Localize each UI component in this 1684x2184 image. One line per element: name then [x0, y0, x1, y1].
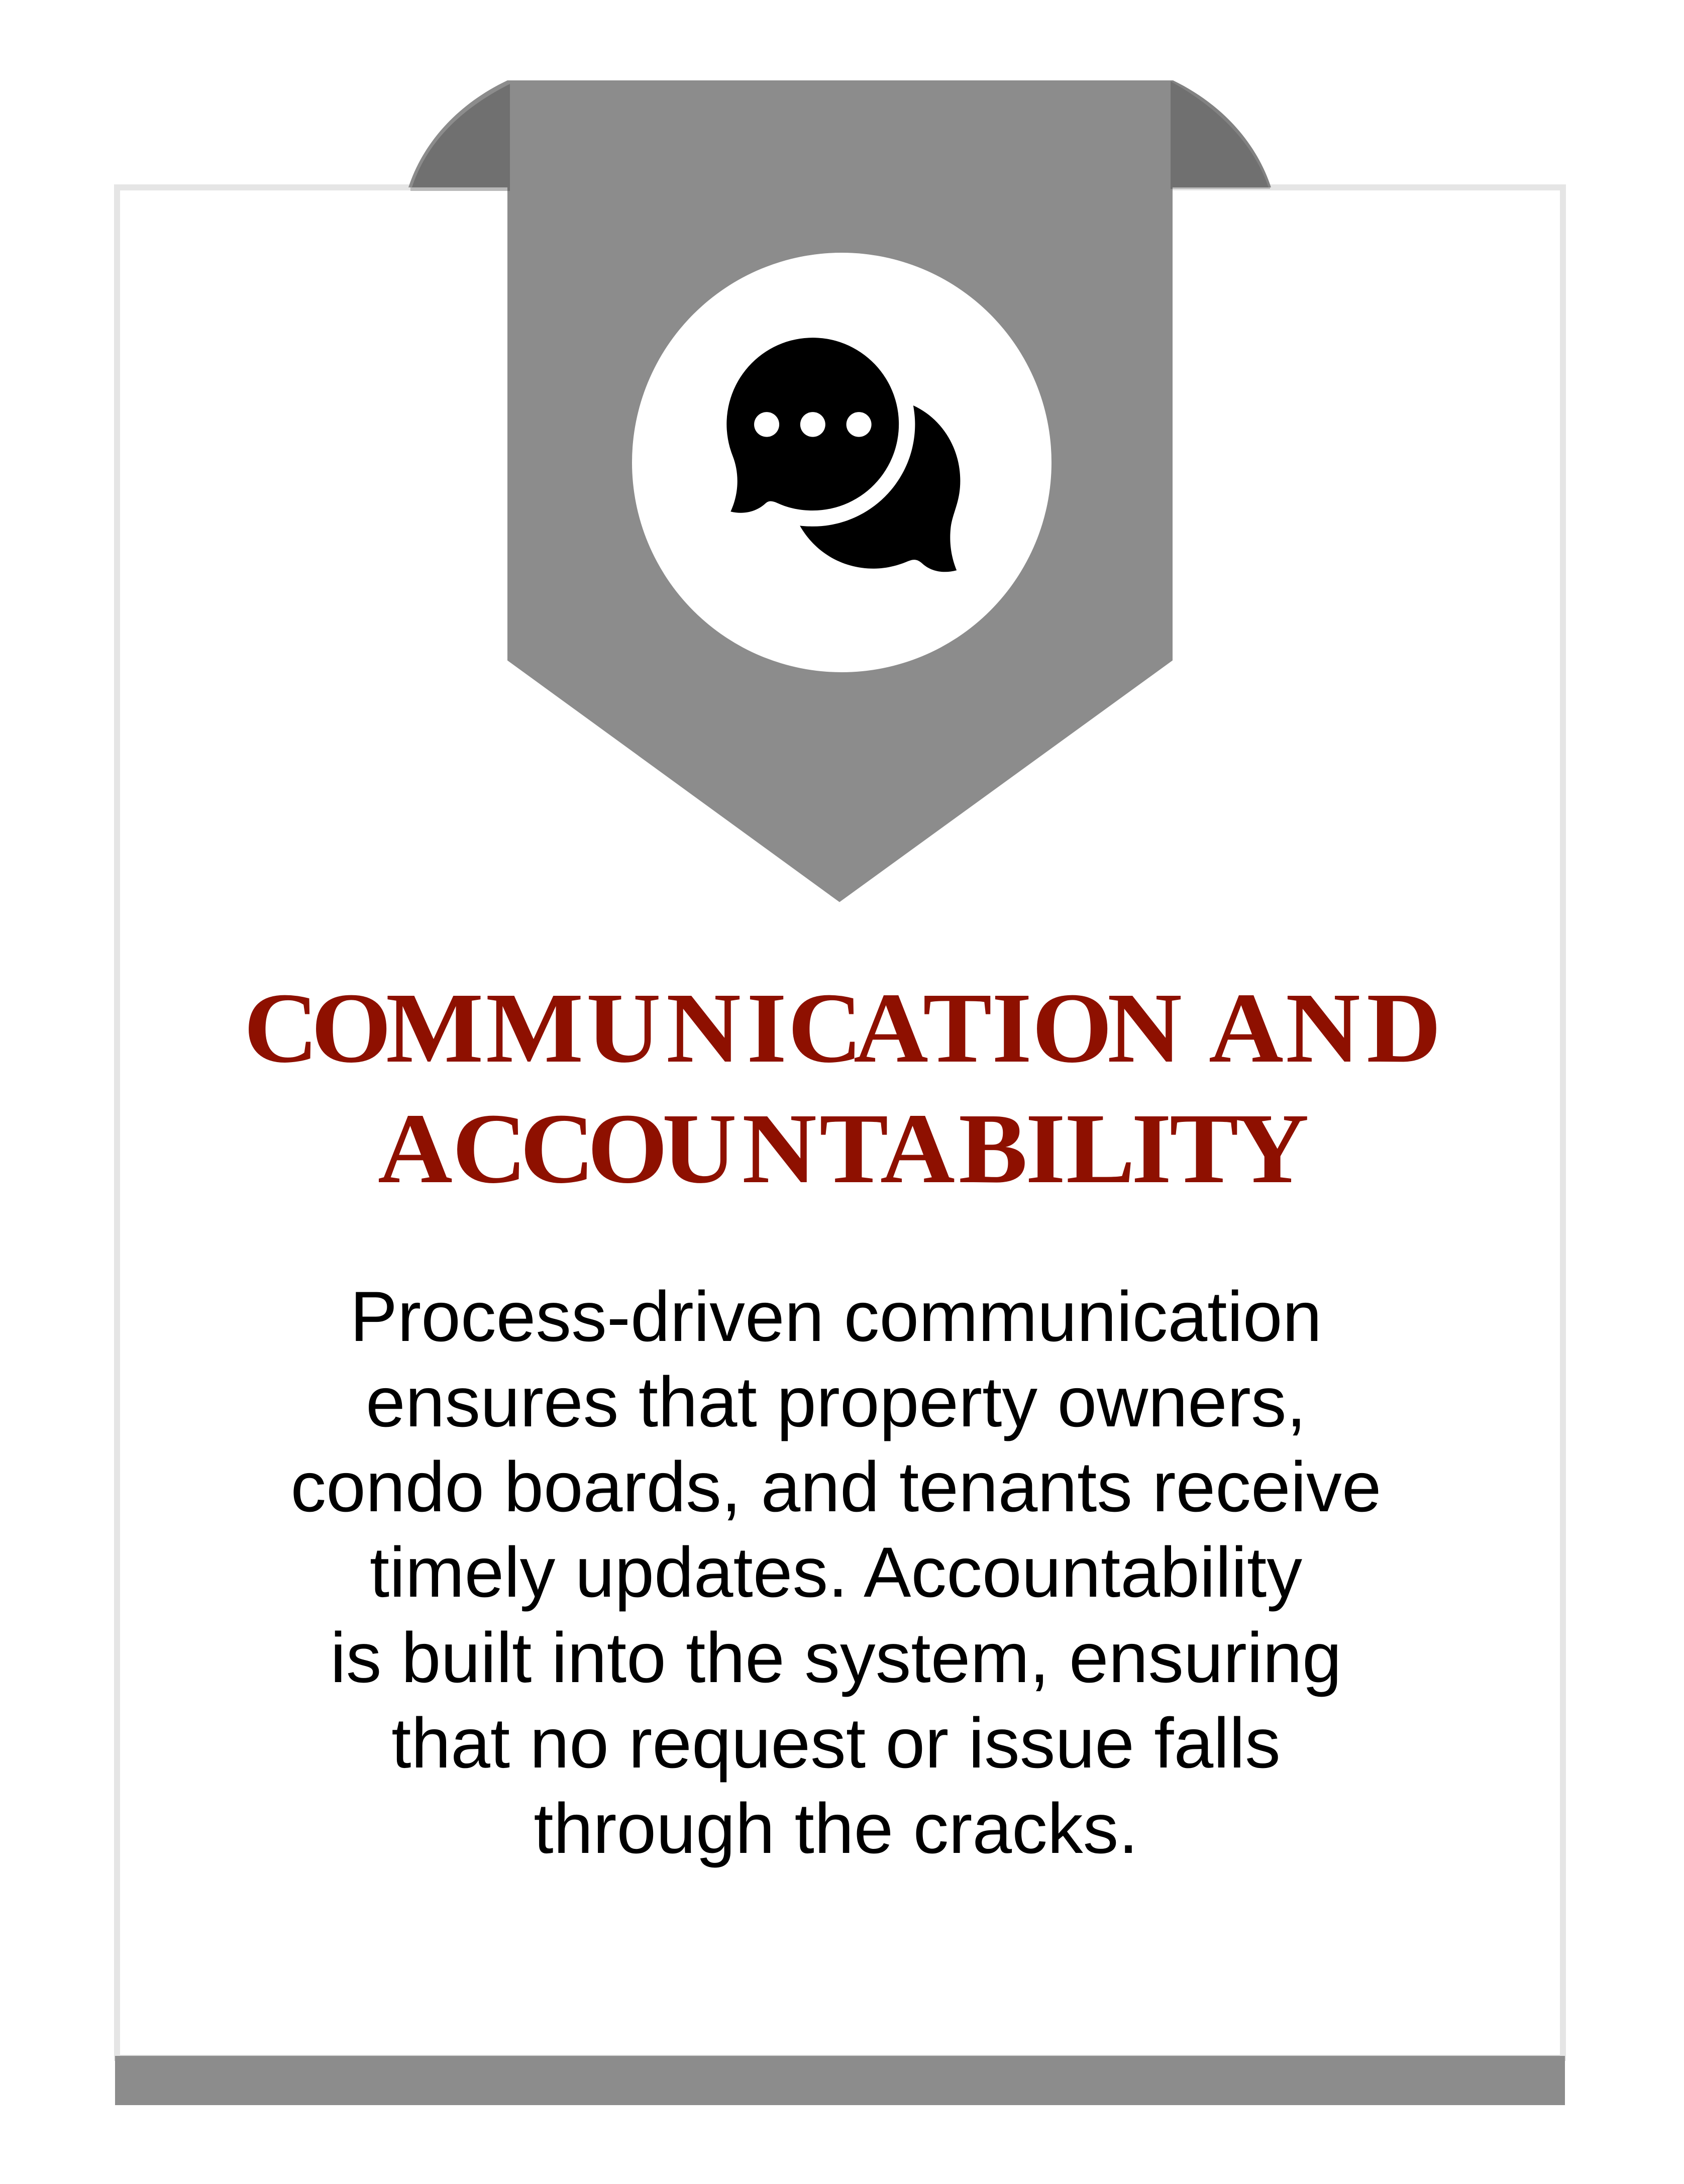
body text: is built into the system, ensuring	[330, 1618, 1342, 1697]
title: COMMUNICATION AND	[244, 972, 1441, 1083]
body text	[290, 1277, 1382, 1868]
ribbon fold: right	[1171, 80, 1271, 189]
body text: timely updates. Accountability	[370, 1532, 1302, 1612]
title	[244, 972, 1441, 1204]
ribbon fold: left	[408, 80, 510, 191]
body text: Process-driven communication	[350, 1277, 1322, 1356]
body text: condo boards, and tenants receive	[290, 1447, 1382, 1526]
body text: through the cracks.	[534, 1789, 1138, 1868]
bottom grey bar	[115, 2056, 1565, 2105]
body text: ensures that property owners,	[366, 1362, 1306, 1441]
panel: card with light border	[114, 184, 1566, 2061]
body text: that no request or issue falls	[391, 1703, 1281, 1783]
ribbon banner	[507, 80, 1173, 902]
icon: chat bubbles	[726, 338, 960, 572]
title: ACCOUNTABILITY	[378, 1093, 1309, 1204]
icon circle background	[632, 253, 1051, 672]
